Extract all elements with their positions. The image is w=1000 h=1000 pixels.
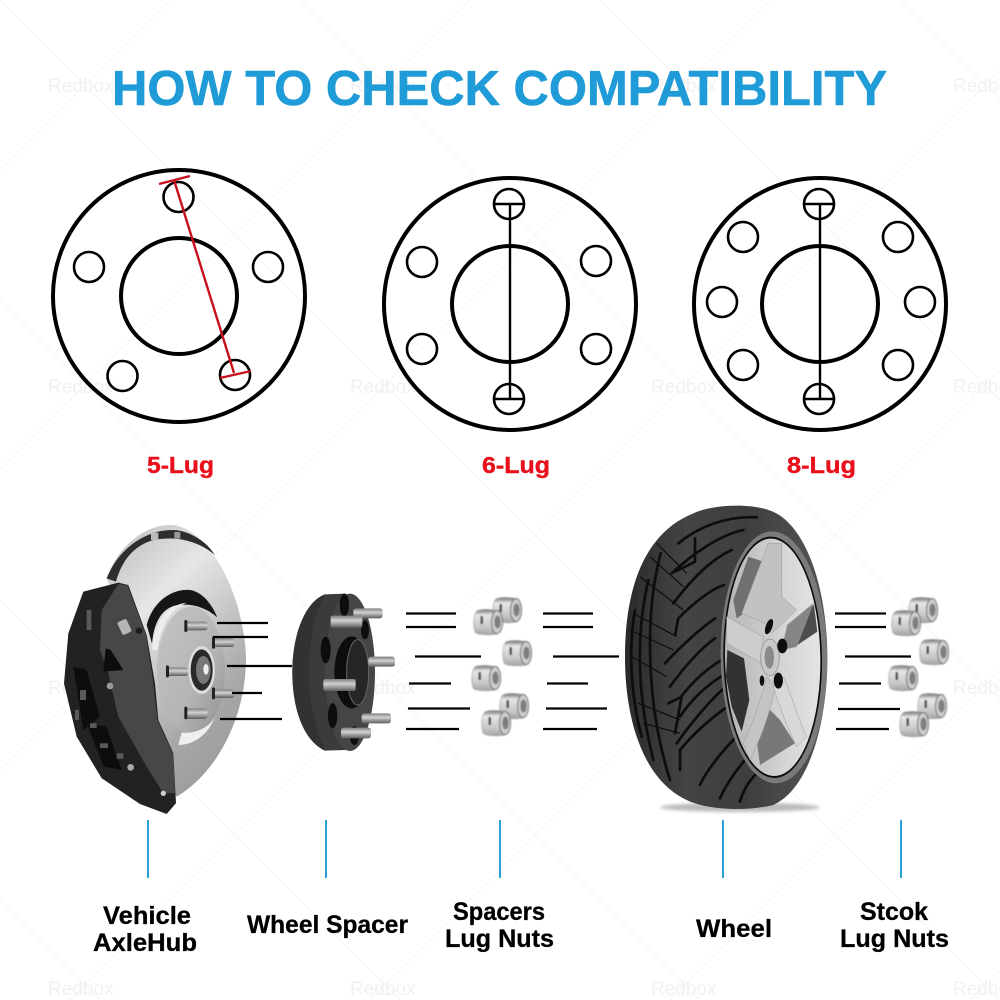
lug studs on hub bbox=[166, 620, 234, 719]
watermark pattern: Redbox bbox=[48, 979, 114, 1000]
watermark pattern: Redbox bbox=[651, 979, 717, 1000]
red measurement line bbox=[159, 176, 251, 378]
diagram: 8-lug bolt pattern bbox=[694, 178, 946, 430]
label: Stcok Lug Nuts: Stcok bbox=[860, 898, 928, 926]
illustration: wheel spacer bbox=[292, 594, 395, 751]
watermark pattern: Redbox bbox=[651, 377, 717, 398]
watermark pattern: Redbox bbox=[350, 678, 416, 699]
diagram: 5-lug bolt pattern bbox=[53, 170, 305, 422]
illustration: vehicle axle hub with brake disc and caliper bbox=[64, 525, 246, 814]
spacer studs bbox=[323, 608, 395, 738]
watermark pattern: Redbox bbox=[350, 377, 416, 398]
label: 5-Lug: 5-Lug bbox=[147, 452, 214, 478]
label: Spacers Lug Nuts: Spacers bbox=[453, 898, 545, 926]
guide lines: nuts to wheel bbox=[543, 614, 619, 729]
tread grooves bbox=[631, 517, 757, 802]
watermark pattern: Redbox bbox=[651, 76, 717, 97]
label: Vehicle AxleHub bbox=[93, 902, 197, 957]
wheel rim bbox=[718, 530, 830, 784]
blue pointer lines bbox=[148, 820, 901, 878]
title: HOW TO CHECK COMPATIBILITY bbox=[112, 61, 887, 116]
label: Stcok Lug Nuts: Lug Nuts bbox=[840, 925, 949, 953]
stock lug nuts bbox=[889, 598, 948, 737]
watermark pattern: Redbox bbox=[350, 76, 416, 97]
illustration: wheel and tire bbox=[625, 506, 827, 812]
label: 6-Lug: 6-Lug bbox=[482, 452, 550, 478]
guide lines: spacer to nuts bbox=[406, 614, 481, 729]
caliper texture bbox=[75, 610, 123, 759]
label: Vehicle AxleHub: AxleHub bbox=[93, 929, 197, 957]
rim spokes bbox=[727, 543, 813, 760]
label: Vehicle AxleHub: Vehicle bbox=[103, 902, 191, 930]
label: Wheel Spacer: Wheel Spacer bbox=[247, 911, 408, 939]
watermark pattern: Redbox bbox=[48, 76, 114, 97]
label: Wheel: Wheel bbox=[696, 915, 772, 943]
watermark pattern: Redbox bbox=[48, 377, 114, 398]
label: Spacers Lug Nuts: Lug Nuts bbox=[445, 925, 554, 953]
rim pockets bbox=[726, 557, 817, 765]
watermark pattern: Redbox bbox=[651, 678, 717, 699]
label: Spacers Lug Nuts bbox=[445, 898, 554, 953]
watermark pattern: Redbox bbox=[350, 979, 416, 1000]
diagram: 6-lug bolt pattern bbox=[384, 178, 636, 430]
guide lines: wheel to stock nuts bbox=[835, 614, 911, 729]
label: 8-Lug: 8-Lug bbox=[787, 452, 856, 478]
guide lines: hub to spacer bbox=[213, 623, 292, 719]
spacers lug nuts bbox=[472, 598, 532, 736]
watermark pattern: Redbox bbox=[48, 678, 114, 699]
label: Stcok Lug Nuts bbox=[840, 898, 949, 953]
wheel hub bbox=[760, 618, 787, 689]
centre bearing bbox=[188, 646, 215, 694]
